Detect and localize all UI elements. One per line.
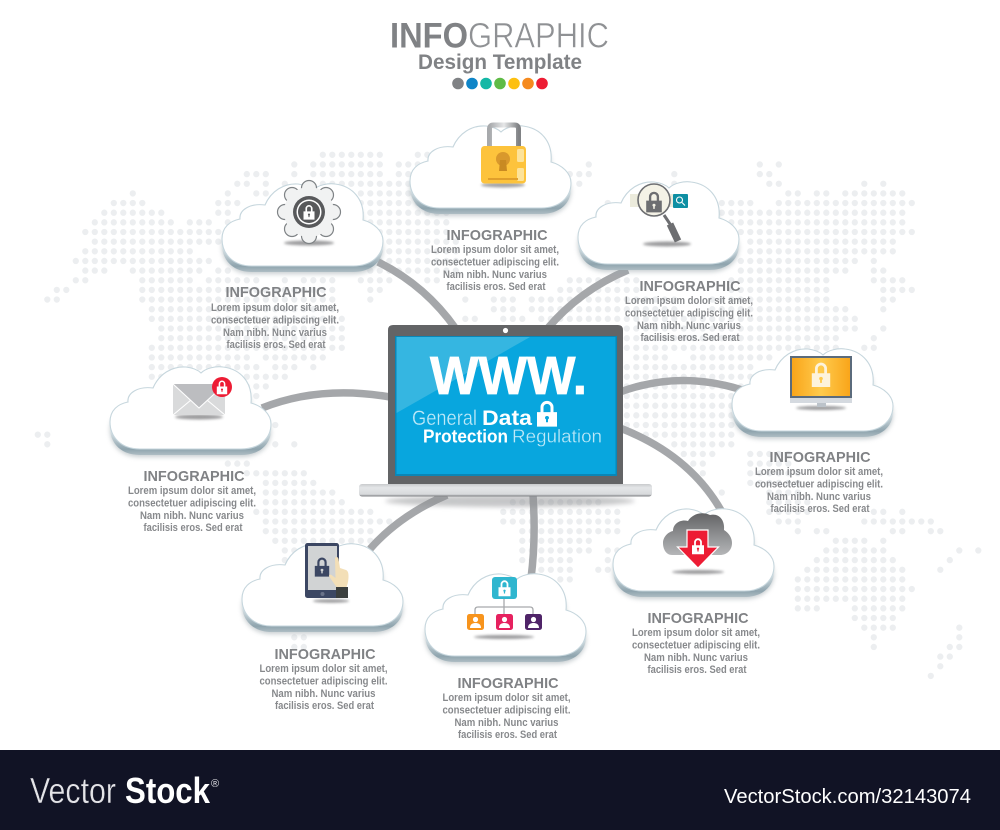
text block: Lorem ipsum dolor sit amet,	[211, 302, 339, 314]
text block: consectetuer adipiscing elit.	[625, 308, 753, 320]
screen heading: WWW.: WWW.	[430, 346, 587, 406]
icon: tablet and hand	[305, 543, 349, 603]
heading: INFOGRAPHIC	[226, 284, 327, 301]
title: Design Template	[418, 51, 582, 74]
dotted world map	[38, 155, 978, 676]
text block: Lorem ipsum dolor sit amet,	[260, 663, 388, 675]
panel: org chart cloud	[425, 574, 586, 741]
text block	[260, 663, 388, 712]
heading: INFOGRAPHIC	[640, 278, 741, 295]
screen text: General Data Protection Regulation: General	[412, 407, 477, 430]
heading: INFOGRAPHIC	[648, 610, 749, 627]
panel: mail cloud	[110, 367, 271, 534]
text block: consectetuer adipiscing elit.	[431, 256, 559, 268]
text block: Nam nibh. Nunc varius	[644, 652, 748, 664]
heading: INFOGRAPHIC	[458, 675, 559, 692]
icon: grey cloud with red down arrow	[663, 513, 732, 574]
text block: Nam nibh. Nunc varius	[767, 491, 871, 503]
panel: search cloud	[578, 182, 753, 344]
icon: gear with lock	[278, 180, 340, 246]
panel: gear cloud	[211, 180, 383, 351]
text block: consectetuer adipiscing elit.	[632, 640, 760, 652]
title: INFO	[390, 16, 468, 56]
heading: INFOGRAPHIC	[144, 468, 245, 485]
connector lines	[262, 262, 742, 578]
icon: org chart with lock	[467, 577, 542, 639]
icon: monitor with lock	[790, 356, 852, 410]
text block: Nam nibh. Nunc varius	[223, 327, 327, 339]
text block: consectetuer adipiscing elit.	[211, 314, 339, 326]
text block: Lorem ipsum dolor sit amet,	[625, 295, 753, 307]
text block	[442, 692, 570, 741]
footer bar: VectorStock.com/32143074	[724, 786, 971, 808]
text block: facilisis eros. Sed erat	[648, 664, 747, 676]
text block: facilisis eros. Sed erat	[275, 700, 374, 712]
text block: consectetuer adipiscing elit.	[755, 478, 883, 490]
heading: INFOGRAPHIC	[446, 227, 548, 244]
screen text: General Data Protection Regulation: Regulation	[512, 426, 602, 446]
icon: padlock	[481, 125, 526, 188]
text block	[128, 485, 256, 534]
screen text: General Data Protection Regulation	[412, 407, 602, 446]
colour dots row	[452, 78, 548, 89]
text block: Nam nibh. Nunc varius	[272, 688, 376, 700]
text block: facilisis eros. Sed erat	[226, 339, 326, 351]
text block: consectetuer adipiscing elit.	[260, 676, 388, 688]
text block: facilisis eros. Sed erat	[640, 332, 740, 344]
text block	[755, 466, 883, 515]
text block: Nam nibh. Nunc varius	[140, 510, 244, 522]
text block: Lorem ipsum dolor sit amet,	[442, 692, 570, 704]
laptop	[359, 325, 652, 507]
title: GRAPHIC	[468, 16, 609, 56]
text block: Lorem ipsum dolor sit amet,	[431, 244, 559, 256]
footer bar	[0, 750, 1000, 830]
text block	[431, 244, 559, 293]
text block	[625, 295, 753, 344]
icon: magnifier with lock	[630, 184, 691, 246]
panel: padlock cloud	[410, 125, 571, 293]
heading: INFOGRAPHIC	[770, 449, 871, 466]
text block: Nam nibh. Nunc varius	[454, 717, 558, 729]
footer bar: Stock	[125, 770, 211, 811]
text block	[632, 627, 760, 676]
text block: facilisis eros. Sed erat	[458, 729, 557, 741]
text block: Lorem ipsum dolor sit amet,	[755, 466, 883, 478]
title	[390, 16, 609, 74]
text block: facilisis eros. Sed erat	[446, 281, 546, 293]
panel: monitor cloud	[732, 349, 893, 515]
text block: facilisis eros. Sed erat	[770, 503, 870, 515]
screen text: General Data Protection Regulation: Protection	[423, 426, 508, 446]
text block: Lorem ipsum dolor sit amet,	[128, 485, 256, 497]
text block: consectetuer adipiscing elit.	[442, 704, 570, 716]
panel: cloud download	[613, 509, 774, 676]
footer bar: Vector	[30, 770, 116, 811]
icon: envelope with red lock badge	[173, 377, 232, 420]
icon: screen padlock	[537, 401, 557, 427]
footer bar: ®	[211, 778, 219, 790]
text block: Nam nibh. Nunc varius	[637, 320, 741, 332]
screen text: General Data Protection Regulation: Data	[482, 407, 532, 430]
text block	[211, 302, 339, 351]
heading: INFOGRAPHIC	[274, 646, 376, 663]
text block: facilisis eros. Sed erat	[144, 522, 243, 534]
panel: tablet cloud	[242, 543, 403, 712]
text block: consectetuer adipiscing elit.	[128, 498, 256, 510]
text block: Lorem ipsum dolor sit amet,	[632, 627, 760, 639]
text block: Nam nibh. Nunc varius	[443, 269, 547, 281]
